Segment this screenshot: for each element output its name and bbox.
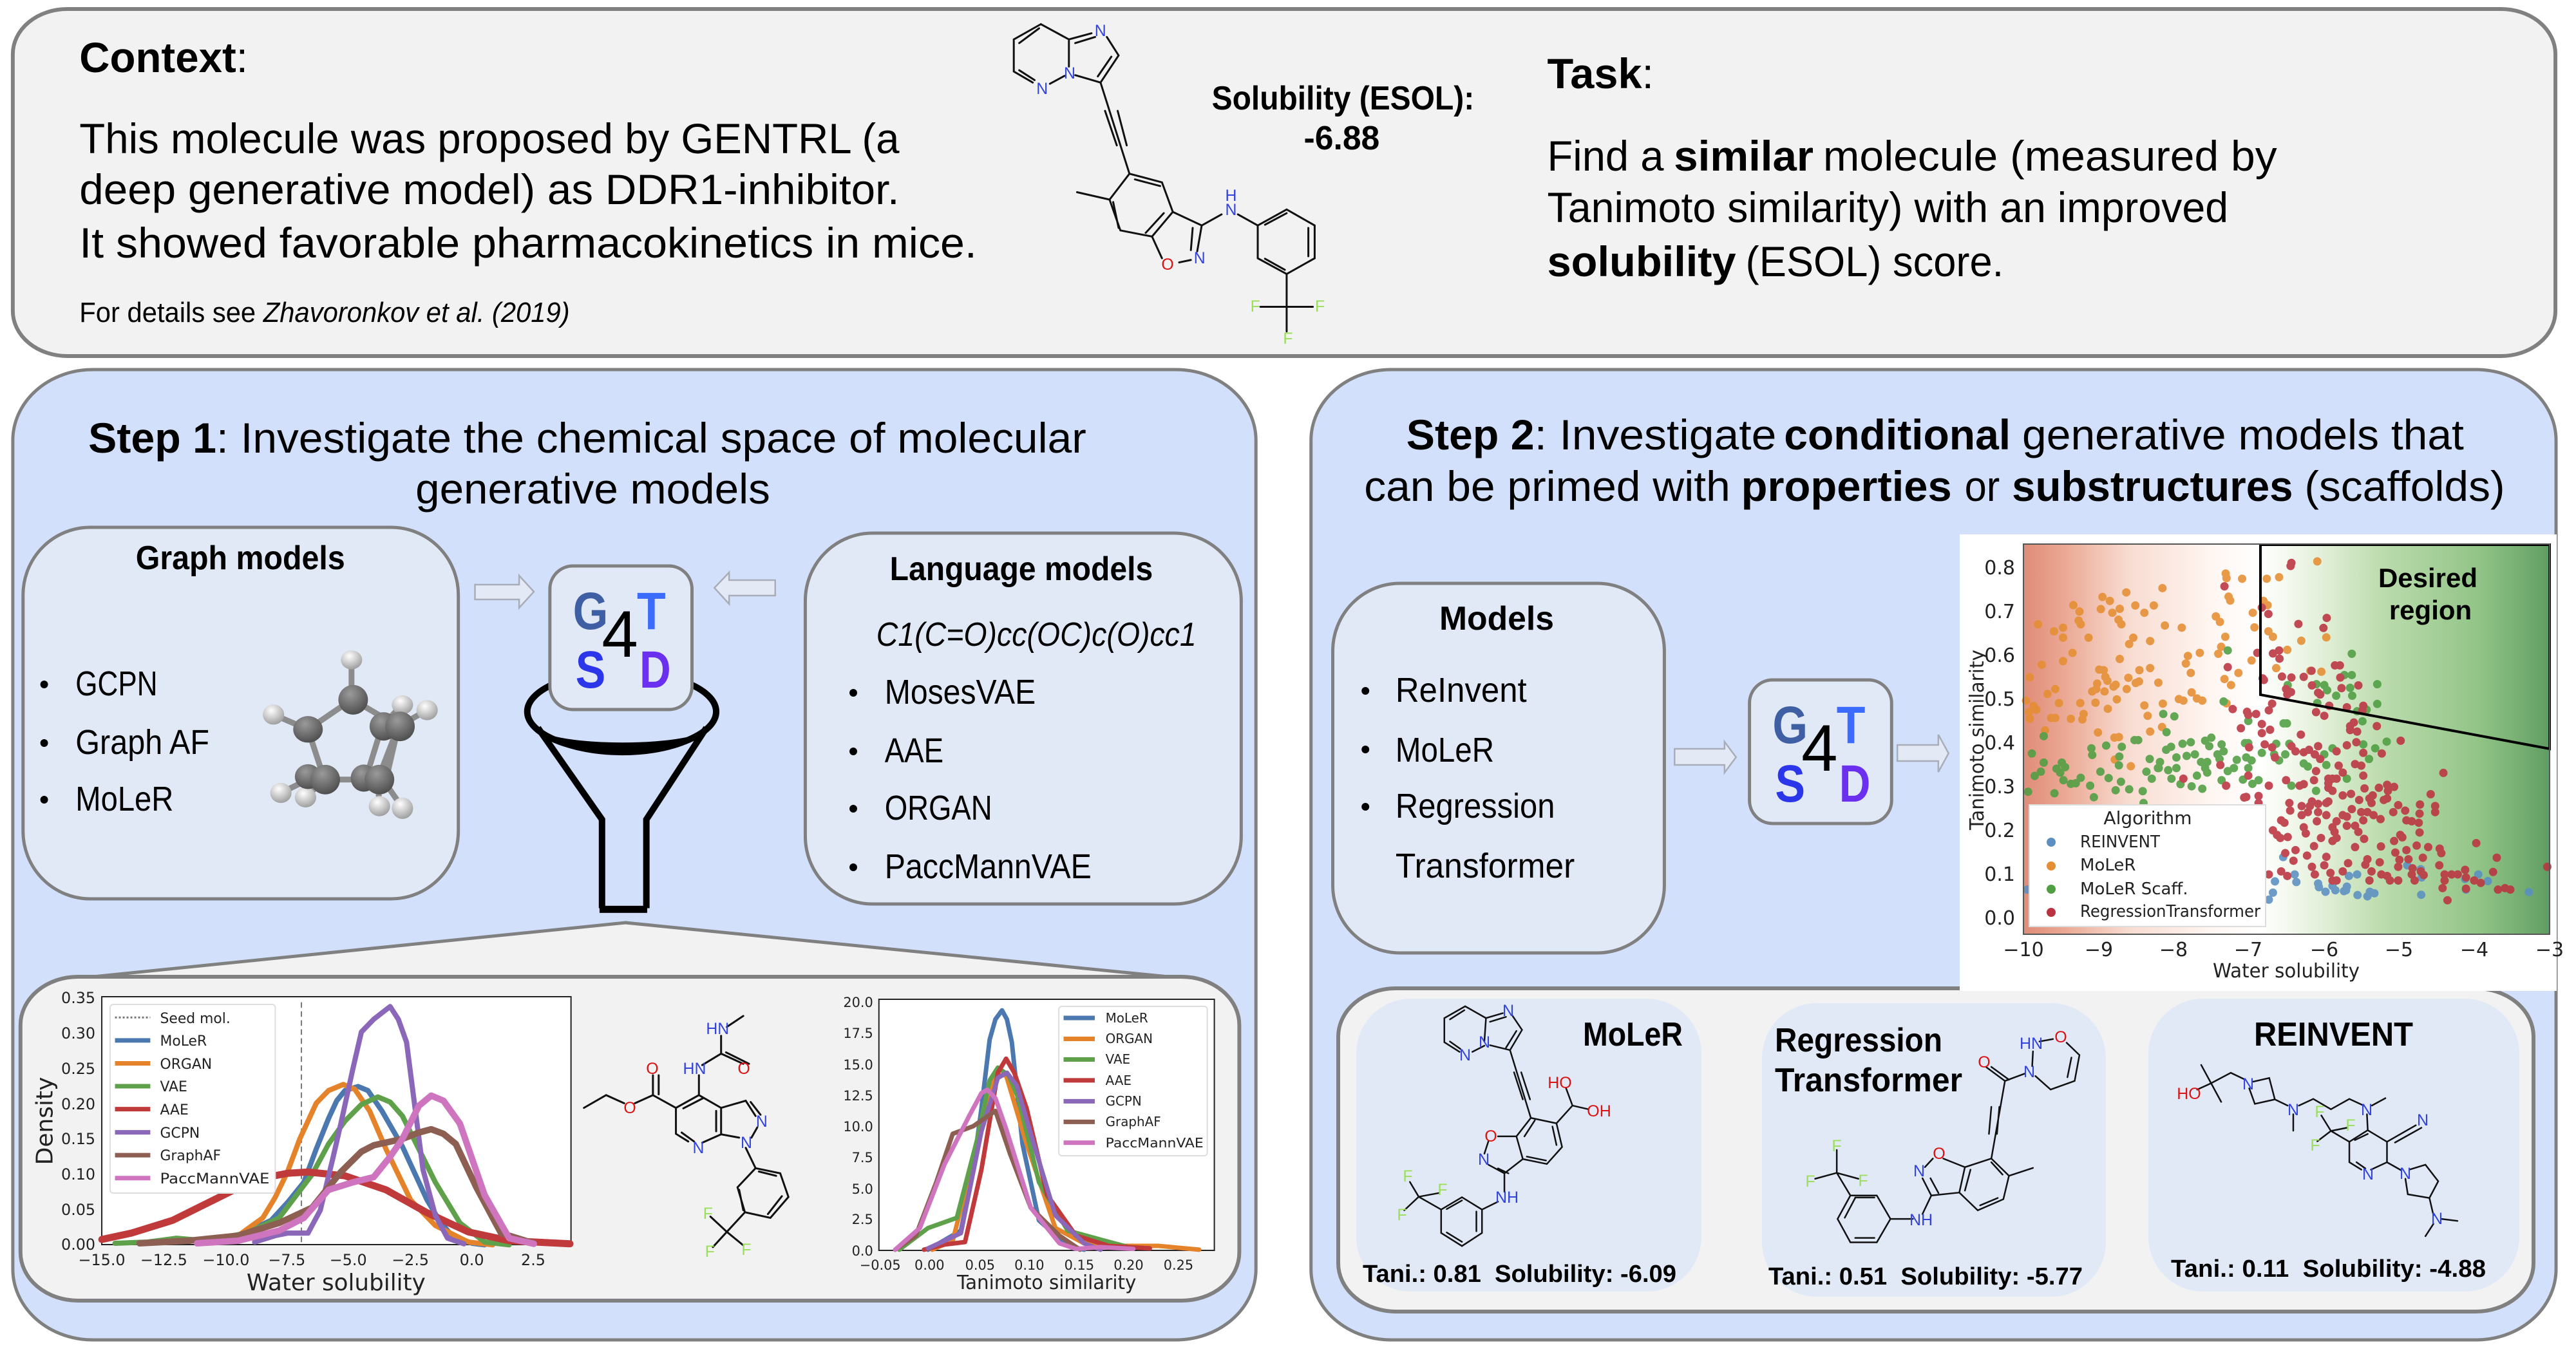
card: REINVENT result [2148,999,2519,1292]
panel: conditional models [1333,583,1664,953]
atom labels: F [703,1205,713,1223]
panel: context and task [13,9,2555,356]
axis tick labels [1966,557,2564,983]
list: language models: ORGAN [885,789,992,827]
arrow: models to logo [1674,742,1736,773]
icon: G4TSD logo [1750,680,1891,824]
callout: desired region: Desired [2378,563,2477,593]
axis tick labels: −15.0 [79,1251,126,1269]
axis tick labels: −0.05 [860,1257,901,1273]
citation: For details see Zhavoronkov et al. (2019) [79,297,570,328]
panel: generated molecule examples [1338,988,2533,1312]
legend: tanimoto chart: GCPN [1106,1093,1142,1109]
text block: task description: solubility [1547,238,1736,285]
axis tick labels: 0.00 [61,1236,95,1254]
atom labels: O [623,1099,636,1117]
icon: funnel [527,672,716,913]
list: conditional models: ReInvent [1396,671,1527,710]
heading: step 2: conditional [1784,411,2011,458]
axis tick labels: 0.20 [1113,1257,1144,1273]
icon: 3D molecule [263,650,438,819]
card: Regression Transformer result [1762,1003,2106,1297]
list: conditional models: MoLeR [1396,731,1494,769]
text block: context description [79,115,977,267]
legend: density chart: AAE [160,1102,189,1118]
heading: context: : [236,33,248,81]
heading: step 1: generative models [415,465,770,513]
atom labels: N [1479,1033,1490,1051]
axis tick labels: −8 [2159,939,2188,961]
axis tick labels: 0.35 [61,989,95,1007]
axis tick labels: 12.5 [843,1088,873,1104]
axis tick labels: 0.5 [1984,688,2015,711]
axis tick labels: 0.4 [1984,732,2015,755]
atom labels: O [1484,1127,1497,1145]
legend: tanimoto chart: GraphAF [1106,1114,1161,1129]
axis tick labels: Tanimoto similarity [1966,650,1989,831]
zoom wedge [61,923,1201,980]
callout: desired region: region [2389,595,2472,625]
atom labels: F [2315,1103,2325,1121]
axis tick labels: 10.0 [843,1119,873,1134]
axis tick labels: 0.15 [61,1130,95,1148]
heading: step 1: Step 1 [88,414,216,462]
axis tick labels: 2.5 [852,1212,873,1227]
axis tick labels: Water solubility [247,1270,426,1296]
chart: water solubility density [32,989,571,1296]
panel: conditional models: Models [1439,599,1554,637]
axis tick labels: 17.5 [843,1026,873,1041]
card: REINVENT result: REINVENT [2254,1016,2413,1053]
legend: algorithm: Algorithm [2103,807,2192,829]
legend: density chart: ORGAN [160,1057,212,1073]
atom labels: N [756,1113,768,1131]
axis tick labels: Density [32,1077,58,1165]
atom labels: HN [683,1060,706,1078]
atom labels: OH [1587,1102,1611,1120]
axis tick labels: −12.5 [140,1251,187,1269]
solubility value: -6.88 [1304,119,1379,156]
legend: density chart: Seed mol. [160,1011,231,1027]
arrow: language models to logo [714,572,775,604]
icon: G4TSD logo: G [1772,696,1808,755]
axis tick labels: 0.7 [1984,601,2015,623]
atom labels [1805,1028,2067,1229]
text block: context description: This molecule was proposed by GENTRL (a [79,115,900,162]
panel: model analysis charts [21,977,1239,1301]
list: language models: MosesVAE [885,673,1036,711]
atom labels: N [692,1139,704,1157]
text block: context description: deep generative model) as DDR1-inhibitor. [79,165,900,213]
atom labels: NH [1495,1189,1519,1207]
list: conditional models: Regression [1396,787,1555,825]
atom labels: N [2362,1165,2374,1183]
icon: G4TSD logo: 4 [601,598,638,671]
atom labels: N [2361,1101,2372,1119]
legend: algorithm: MoLeR Scaff. [2080,880,2188,899]
icon: G4TSD logo [550,566,692,710]
legend: tanimoto chart: MoLeR [1106,1010,1148,1026]
card: Regression Transformer result: Transformer [1775,1062,1962,1099]
atom labels [2177,1075,2443,1228]
list: conditional models: Transformer [1396,847,1575,885]
axis tick labels: 0.10 [1014,1257,1045,1273]
list: conditional models [1361,671,1575,885]
card: Regression Transformer result: Tani.: 0.51 Solubility: -5.77 [1768,1263,2083,1290]
axis tick labels: −7.5 [268,1251,305,1269]
axis tick labels [843,995,1193,1294]
atom labels: O [1933,1145,1946,1163]
molecule: example from chemical space [584,1016,788,1261]
atom labels: N [741,1134,752,1152]
heading: step 1 [88,414,1086,513]
heading: step 1: : Investigate the chemical space of molecular [216,414,1086,462]
solubility value: Solubility (ESOL): [1212,79,1474,117]
legend: tanimoto chart: PaccMannVAE [1106,1135,1204,1151]
legend: density chart: GraphAF [160,1148,221,1164]
atom labels: F [1832,1137,1842,1155]
list: language models: PaccMannVAE [885,847,1092,886]
atom labels: N [2287,1101,2299,1119]
text block: task description: similar [1674,132,1814,180]
heading: step 2: generative models that [2022,411,2464,458]
axis tick labels: −4 [2460,939,2488,961]
atom labels: N [2431,1210,2443,1228]
atom labels [623,1020,768,1261]
legend: algorithm: REINVENT [2080,833,2160,852]
atom labels: HN [2020,1035,2043,1053]
text block: task description: Tanimoto similarity) with an improved [1547,184,2228,231]
legend: density chart: GCPN [160,1125,200,1142]
axis tick labels: 0.0 [852,1243,873,1259]
card: REINVENT result: Tani.: 0.11 Solubility: -4.88 [2171,1256,2486,1283]
atom labels: F [1437,1181,1448,1199]
atom labels: F [1315,297,1325,315]
chart: tanimoto similarity density [843,995,1215,1294]
atom labels: N [1225,201,1236,219]
chart: scatter of generated molecules [1960,534,2564,991]
axis tick labels: 7.5 [852,1150,873,1165]
axis tick labels: 0.00 [914,1257,945,1273]
atom labels: F [1397,1206,1407,1224]
legend: density chart: VAE [160,1079,187,1095]
solubility value [1212,79,1474,156]
heading: step 2: or [1965,462,2000,510]
heading: context: Context [79,33,236,81]
axis tick labels: 0.20 [61,1095,95,1113]
axis tick labels: −6 [2310,939,2338,961]
atom labels: O [737,1060,750,1078]
text block: task description: molecule (measured by [1823,132,2277,180]
atom labels: F [741,1241,752,1259]
axis tick labels: −10.0 [202,1251,249,1269]
atom labels: F [1805,1172,1815,1191]
panel: graph models [23,527,459,899]
axis tick labels: −5.0 [330,1251,367,1269]
panel: step 1 [13,370,2564,1340]
icon: G4TSD logo: G [573,582,608,641]
axis tick labels: 0.25 [61,1060,95,1078]
axis tick labels: −9 [2085,939,2113,961]
legend: tanimoto chart: AAE [1106,1073,1132,1088]
icon: G4TSD logo: 4 [1801,711,1838,785]
legend: tanimoto chart: VAE [1106,1051,1130,1067]
axis tick labels: −2.5 [392,1251,429,1269]
text block: task description: (ESOL) score. [1746,238,2003,285]
axis tick labels [32,989,545,1296]
atom labels: HO [2177,1085,2201,1103]
axis tick labels: −5 [2385,939,2413,961]
axis tick labels: 0.1 [1984,863,2015,886]
desired region outline [2260,545,2550,749]
heading: step 2: properties [1741,462,1952,510]
atom labels: N [1478,1151,1490,1169]
atom labels: N [1459,1046,1471,1064]
atom labels: N [2400,1165,2411,1183]
atom labels: O [1978,1053,1991,1071]
atom labels: H [1225,187,1236,205]
molecule: seed molecule [1014,22,1325,348]
card: MoLeR result: MoLeR [1583,1016,1683,1053]
axis tick labels: 0.6 [1984,645,2015,667]
atom labels: NH [1909,1211,1933,1229]
list: graph models: Graph AF [75,723,209,762]
atom labels: N [1502,1002,1514,1020]
axis tick labels: 0.30 [61,1024,95,1042]
axis tick labels: 0.0 [460,1251,484,1269]
atom labels: N [2242,1075,2254,1093]
atom labels: F [1251,297,1260,315]
axis tick labels: 0.10 [61,1165,95,1183]
callout: desired region [2378,563,2477,625]
legend: algorithm: MoLeR [2080,856,2136,875]
card: MoLeR result: Tani.: 0.81 Solubility: -6.09 [1363,1261,1676,1288]
atom labels: HN [706,1020,729,1038]
panel: step 2 [1311,370,2564,1340]
axis tick labels: 0.05 [965,1257,995,1273]
axis tick labels: 0.8 [1984,557,2015,579]
legend: tanimoto chart: ORGAN [1106,1031,1153,1046]
card: MoLeR result [1356,999,1701,1292]
legend: density chart: PaccMannVAE [160,1171,269,1187]
atom labels: N [2417,1111,2429,1129]
icon: G4TSD logo: T [1837,696,1866,755]
heading: task: Task [1547,50,1642,97]
card: Regression Transformer result: Regression [1775,1022,1942,1059]
list: graph models [41,664,209,818]
arrow: logo to scatter plot [1897,735,1949,772]
atom labels: N [1064,64,1075,82]
list: graph models: GCPN [75,664,158,703]
icon: G4TSD logo: S [576,641,605,699]
panel: language models [805,533,1241,904]
axis tick labels: 20.0 [843,995,873,1010]
atom labels: F [705,1243,715,1261]
legend: algorithm [2029,805,2266,927]
axis tick labels: Tanimoto similarity [956,1272,1136,1294]
atom labels: O [2054,1028,2067,1046]
atom labels: F [1403,1167,1413,1185]
axis tick labels: −3 [2535,939,2564,961]
list: language models: AAE [885,731,943,770]
axis tick labels: 0.3 [1984,776,2015,798]
axis tick labels: 0.0 [1984,907,2015,930]
icon: G4TSD logo: D [639,641,671,699]
axis tick labels: 0.05 [61,1201,95,1219]
legend: tanimoto chart [1059,1006,1208,1156]
heading: step 2: : Investigate [1535,411,1776,458]
heading: step 2 [1364,411,2505,510]
axis tick labels: 2.5 [521,1251,545,1269]
heading: step 2: can be primed with [1364,462,1730,510]
atom labels: F [1858,1172,1868,1190]
axis tick labels: Water solubility [2213,960,2360,983]
heading: task: : [1642,50,1654,97]
text block: task description [1547,132,2277,285]
heading: step 2: (scaffolds) [2304,462,2505,510]
axis tick labels: 0.15 [1065,1257,1094,1273]
panel: language models: Language models [890,550,1153,587]
list: language models [849,673,1092,886]
atom labels [1036,22,1325,348]
axis tick labels: 5.0 [852,1181,873,1197]
axis tick labels: 0.2 [1984,820,2015,842]
atom labels: N [1036,80,1048,98]
atom labels: O [646,1060,659,1078]
icon: G4TSD logo: S [1775,755,1805,813]
axis tick labels: 0.25 [1164,1257,1193,1273]
panel: graph models: Graph models [136,539,345,576]
legend: density chart: MoLeR [160,1033,207,1050]
legend: density chart [110,1004,275,1193]
arrow: graph models to logo [475,576,534,608]
legend: algorithm: RegressionTransformer [2080,902,2260,921]
icon: G4TSD logo: T [637,582,666,641]
list: graph models: MoLeR [75,780,173,818]
atom labels: F [1283,330,1293,348]
axis tick labels: −7 [2234,939,2262,961]
atom labels: HO [1548,1074,1572,1092]
atom labels: N [1194,249,1206,267]
icon: G4TSD logo: D [1839,755,1870,813]
atom labels: O [1161,256,1174,274]
atom labels: F [2310,1136,2320,1154]
panel: language models: C1(C=O)cc(OC)c(O)cc1 [876,616,1197,653]
text block: context description: It showed favorable pharmacokinetics in mice. [79,219,977,267]
text block: task description: Find a [1547,132,1664,180]
axis tick labels: −10 [2003,939,2044,961]
atom labels: F [2345,1116,2356,1134]
heading: step 2: substructures [2012,462,2293,510]
atom labels [1397,1002,1611,1224]
atom labels: N [1913,1162,1925,1180]
atom labels: N [1095,22,1106,40]
heading: step 2: Step 2 [1406,411,1535,458]
axis tick labels: 15.0 [843,1057,873,1073]
atom labels: N [2023,1063,2035,1081]
